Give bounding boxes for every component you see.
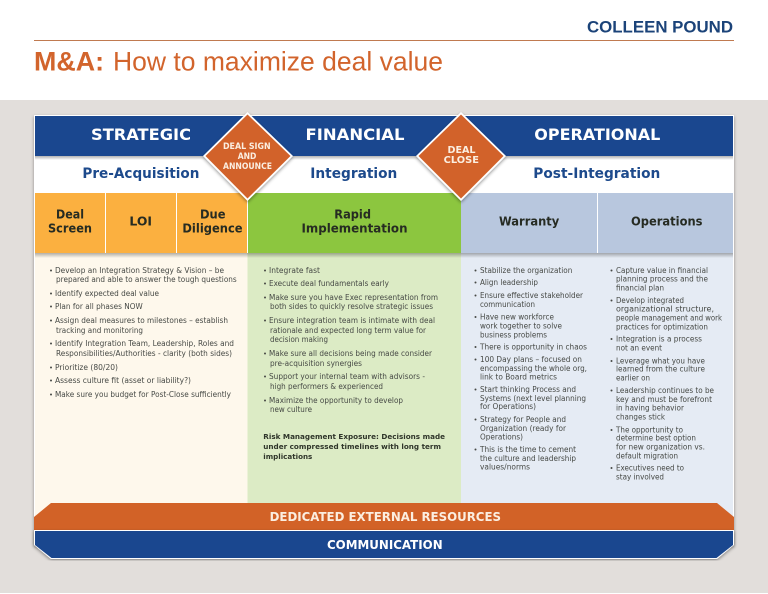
text block: warranty bullets: Ensure effective stakeholder [480,291,584,300]
stage: due diligence [182,206,243,235]
stage: due diligence: Due [200,206,226,221]
header band [35,116,733,160]
callout: risk management exposure: under compressed timelines with long term [263,442,441,451]
text block: warranty bullets: There is opportunity in chaos [479,342,587,351]
text block: operations bullets: learned from the culture [616,364,705,373]
stage: warranty: Warranty [499,213,559,228]
text block: operations bullets: Leadership continues to be [616,386,714,395]
text block: operations bullets: default migration [616,451,678,460]
text block: financial bullets [264,266,438,414]
label: post-integration: Post-Integration [533,166,660,182]
text block: warranty bullets: Strategy for People and [480,415,566,424]
brand name: COLLEEN POUND [587,18,733,36]
text block: operations bullets: people management and work [616,313,723,322]
text block: financial bullets: both sides to quickly resolve strategic issues [270,302,433,311]
text block: warranty bullets: the culture and leadership [480,454,576,463]
bar: dedicated external resources: DEDICATED EXTERNAL RESOURCES [270,510,501,524]
label: pre-acquisition: Pre-Acquisition [82,166,199,182]
text block: strategic bullets: Develop an Integration Strategy & Vision – be [55,266,224,275]
text block: operations bullets: Executives need to [616,463,684,472]
text block: operations bullets: not an event [616,343,662,352]
text block: warranty bullets: work together to solve [480,321,562,330]
text block: strategic bullets: Make sure you budget for Post-Close sufficiently [55,390,231,399]
text block: operations bullets: in having behavior [616,403,685,412]
text block: financial bullets: Execute deal fundamentals early [269,279,389,288]
text block: warranty bullets [474,266,587,471]
text block: operations bullets: The opportunity to [615,425,683,434]
text block: operations bullets: stay involved [616,472,664,481]
text block: financial bullets: pre-acquisition synergies [270,359,362,368]
stage: rapid implementation [302,206,408,235]
text block: operations bullets: for new organization vs. [616,442,705,451]
diamond: deal sign and announce: ANNOUNCE [223,161,272,171]
text block: warranty bullets: Operations) [480,432,523,441]
stage: deal screen [48,206,92,235]
title: How to maximize deal value [113,46,443,76]
text block: warranty bullets: 100 Day plans – focused on [480,355,582,364]
text block: warranty bullets: Start thinking Process and [480,385,576,394]
text block: operations bullets: key and must be forefront [616,395,712,404]
callout: risk management exposure [263,432,445,461]
text block: financial bullets: decision making [270,335,328,344]
stage: deal screen: Deal [56,206,84,221]
text block: strategic bullets: Identify Integration Team, Leadership, Roles and [55,339,234,348]
heading: operational: OPERATIONAL [534,125,660,144]
text block: financial bullets: rationale and expected long term value for [270,326,427,335]
bar: dedicated external resources [34,503,734,530]
diamond: deal close: DEAL [448,145,476,156]
bar: communication: COMMUNICATION [327,538,443,552]
text block: financial bullets: high performers & experienced [270,382,383,391]
diamond: deal sign and announce [203,112,293,201]
text block: financial bullets: Ensure integration team is intimate with deal [269,316,435,325]
diamond: deal sign and announce: DEAL SIGN [223,141,271,151]
text block: warranty bullets: business problems [480,330,547,339]
stage: deal screen: Screen [48,220,92,235]
text block: strategic bullets: Identify expected deal value [55,289,159,298]
title: M&A: [34,46,104,76]
diamond: deal close: CLOSE [444,155,479,166]
stage: rapid implementation: Rapid [334,206,371,221]
text block: operations bullets: organizational structure, [616,304,714,313]
text block: strategic bullets: prepared and able to answer the tough questions [56,275,237,284]
text block: operations bullets: earlier on [616,373,650,382]
framework panel [34,112,734,559]
text block: financial bullets: Maximize the opportunity to develop [269,396,403,405]
stage columns [35,193,733,258]
text block: warranty bullets: Align leadership [480,278,538,287]
text block: warranty bullets: Systems (next level planning [480,394,586,403]
text block: operations bullets: determine best option [616,433,696,442]
text block: financial bullets: Make sure all decisions being made consider [269,349,433,358]
diamond: deal close [416,112,506,201]
text block: warranty bullets: This is the time to cement [479,445,576,454]
heading: financial: FINANCIAL [306,125,404,144]
text block: warranty bullets: link to Board metrics [480,372,557,381]
stage: operations: Operations [631,213,702,228]
text block: strategic bullets [50,266,237,399]
callout: risk management exposure: implications [263,452,313,461]
text block: warranty bullets: encompassing the whole org, [480,364,587,373]
text block: operations bullets: Develop integrated [616,296,684,305]
stage: rapid implementation: Implementation [302,220,408,235]
text block: operations bullets: Leverage what you have [616,356,705,365]
phase labels [82,166,660,182]
text block: financial bullets: Make sure you have Exec representation from [269,293,438,302]
text block: warranty bullets: Stabilize the organization [480,266,572,275]
text block: strategic bullets: Prioritize (80/20) [55,363,118,372]
bar: communication [34,530,734,559]
text block: warranty bullets: for Operations) [480,402,536,411]
text block: operations bullets: changes stick [616,412,666,421]
text block: operations bullets: planning process and the [616,274,708,283]
text block: financial bullets: Integrate fast [269,266,320,275]
text block: operations bullets: Integration is a process [616,334,702,343]
text block: strategic bullets: Assign deal measures to milestones – establish [55,316,228,325]
text block: warranty bullets: communication [480,300,535,309]
text block: operations bullets: Capture value in financial [616,266,708,275]
panel: body columns [35,253,733,530]
text block: warranty bullets: Have new workforce [480,312,554,321]
stage: LOI: LOI [129,213,152,228]
heading: strategic: STRATEGIC [91,125,191,144]
label: integration: Integration [310,166,397,182]
text block: operations bullets [610,266,723,481]
callout: risk management exposure: Risk Management Exposure: Decisions made [263,432,445,441]
text block: strategic bullets: tracking and monitoring [56,326,143,335]
text block: warranty bullets: Organization (ready for [480,424,567,433]
text block: financial bullets: new culture [270,405,312,414]
text block: strategic bullets: Assess culture fit (asset or liability?) [55,376,191,385]
text block: strategic bullets: Plan for all phases NOW [55,302,143,311]
text block: financial bullets: Support your internal team with advisors - [269,372,425,381]
diamond: deal sign and announce: AND [238,151,256,161]
text block: operations bullets: financial plan [616,283,664,292]
stage: due diligence: Diligence [182,220,243,235]
text block: warranty bullets: values/norms [480,462,530,471]
text block: strategic bullets: Responsibilities/Authorities - clarity (both sides) [56,349,232,358]
text block: operations bullets: practices for optimization [616,322,708,331]
